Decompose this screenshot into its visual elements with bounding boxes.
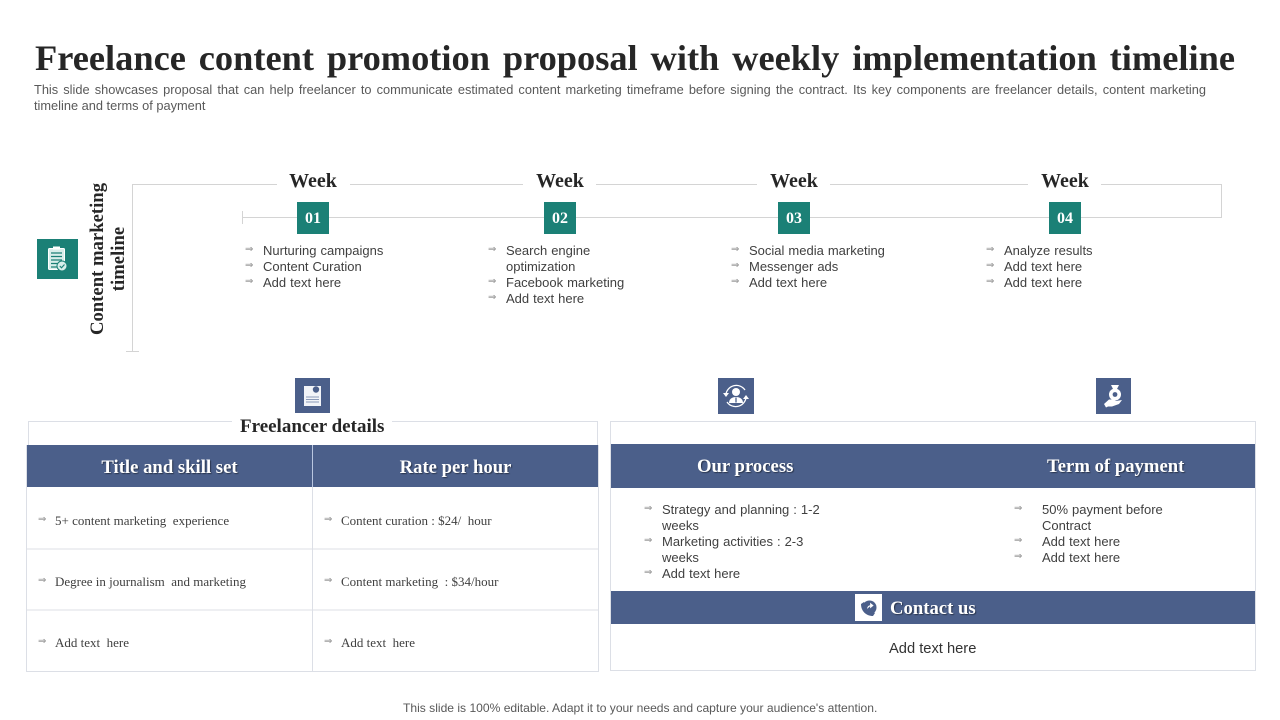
week 2 tasks: optimization [506, 259, 575, 274]
payment list [1014, 502, 1163, 565]
week 1 tasks: Nurturing campaigns [263, 243, 383, 258]
icon: hand holding money bag [1096, 378, 1131, 414]
heading: content marketing timeline: timeline [108, 227, 129, 291]
header: title and skill set: Title and skill set [101, 457, 238, 478]
week 2 tasks [488, 243, 624, 306]
cell: add text right: Add text here [341, 635, 415, 650]
header: term of payment: Term of payment [1047, 456, 1184, 477]
icon: process person with arrows [718, 378, 754, 414]
heading: freelancer details: Freelancer details [240, 416, 384, 437]
icon: freelancer document [295, 378, 330, 413]
week number 03: 03 [786, 210, 802, 227]
header: our process: Our process [697, 456, 793, 477]
week 1 tasks [246, 243, 383, 290]
icon: phone [855, 594, 882, 621]
header band: our process and term of payment [611, 444, 1255, 488]
process list: Marketing activities : 2-3 [662, 534, 803, 549]
week 1 label: Week [289, 170, 337, 192]
week 2 tasks: Facebook marketing [506, 275, 624, 290]
subtitle description [34, 82, 1206, 113]
week 4 tasks: Add text here [1004, 259, 1082, 274]
heading: content marketing timeline [87, 183, 129, 335]
week number 02: 02 [552, 210, 568, 227]
payment list: Contract [1042, 518, 1091, 533]
week 4 tasks [986, 243, 1093, 290]
week number 03 [778, 202, 810, 234]
week 3 tasks: Messenger ads [749, 259, 838, 274]
process list: Add text here [662, 566, 740, 581]
week 3 tasks: Add text here [749, 275, 827, 290]
cell: degree: Degree in journalism and marketing [55, 574, 246, 589]
header: title and skill set [27, 445, 312, 487]
week number 04: 04 [1057, 210, 1073, 227]
week 1 tasks: Add text here [263, 275, 341, 290]
header: rate per hour [313, 445, 598, 487]
footer note: This slide is 100% editable. Adapt it to your needs and capture your audience's attention. [403, 701, 877, 715]
week number 01 [297, 202, 329, 234]
week number 01: 01 [305, 210, 321, 227]
week 4 tasks: Analyze results [1004, 243, 1093, 258]
process list: weeks [662, 550, 699, 565]
process list [644, 502, 820, 581]
payment list: Add text here [1042, 534, 1120, 549]
panel: process and payment [610, 421, 1256, 671]
week 3 label: Week [770, 170, 818, 192]
contact text: Add text here [889, 641, 976, 657]
week 2 label: Week [536, 170, 584, 192]
week 4 label: Week [1041, 170, 1089, 192]
process list: weeks [662, 518, 699, 533]
icon: clipboard with check [37, 239, 78, 279]
heading: contact us: Contact us [890, 598, 976, 619]
payment list: Add text here [1042, 550, 1120, 565]
contact us band [611, 591, 1255, 624]
week 3 tasks: Social media marketing [749, 243, 885, 258]
week 1 tasks: Content Curation [263, 259, 362, 274]
week 3 tasks [732, 243, 885, 290]
cell: experience: 5+ content marketing experience [55, 513, 229, 528]
heading: content marketing timeline: Content marketing [87, 183, 108, 335]
process list: Strategy and planning : 1-2 [662, 502, 820, 517]
subtitle description: This slide showcases proposal that can help freelancer to communicate estimated content marketing timeframe before signing the contract. Its key components are freelancer details, content marketing [34, 82, 1206, 97]
week 2 tasks: Search engine [506, 243, 590, 258]
cell: add text left: Add text here [55, 635, 129, 650]
subtitle description: timeline and terms of payment [34, 98, 205, 113]
cell: rate curation: Content curation : $24/ hour [341, 513, 492, 528]
cell: rate marketing: Content marketing : $34/hour [341, 574, 498, 589]
week number 02 [544, 202, 576, 234]
freelancer frame lines [26, 421, 599, 672]
week 4 tasks: Add text here [1004, 275, 1082, 290]
payment list: 50% payment before [1042, 502, 1163, 517]
panel: freelancer details [26, 416, 599, 672]
header: rate per hour: Rate per hour [400, 457, 511, 478]
title: Freelance content promotion proposal with weekly implementation timeline [35, 38, 1235, 78]
week 2 tasks: Add text here [506, 291, 584, 306]
week number 04 [1049, 202, 1081, 234]
